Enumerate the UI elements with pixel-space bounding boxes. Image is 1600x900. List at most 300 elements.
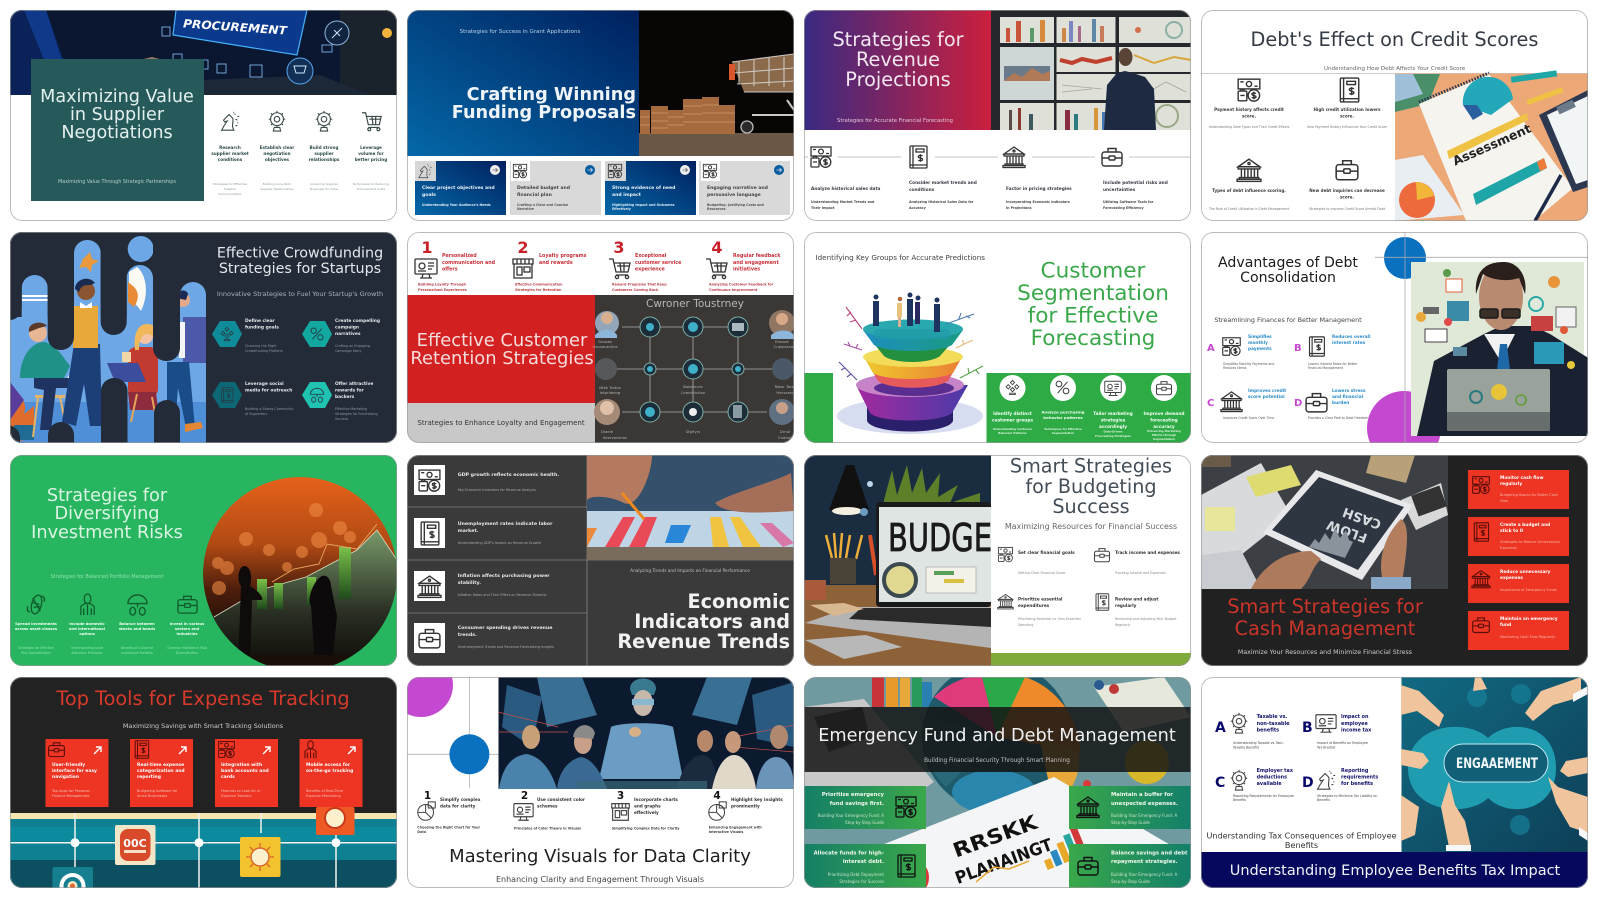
panel: Strategies for Revenue Projections [804, 10, 1191, 221]
diagram: customer journey photo: Ntkk Trates [599, 385, 621, 390]
step cards: Strong evidence of need [612, 185, 675, 191]
four tips: Allocation Principles [71, 651, 103, 655]
icons and steps: Proposals for Value [310, 187, 338, 191]
hexagon features: backers [335, 394, 355, 400]
photo: procurement screen: PROCUREMENT [183, 16, 289, 38]
red tip cards: Monitoring Cash Flow Regularly [1500, 635, 1555, 639]
red tip cards: expenses [1500, 576, 1523, 581]
tips grid: Prioritizing Essential vs. Non-Essential [1018, 617, 1081, 621]
lettered points: available [1256, 781, 1282, 787]
diagram: customer journey photo: Interventrion [603, 435, 628, 440]
subtitle: Enhancing Clarity and Engagement Through Visuals [496, 875, 704, 884]
numbered steps: 3 [613, 238, 625, 257]
icons and steps: Communication [218, 192, 242, 196]
panel: Emergency Fund and Debt Management: repayment strategies. [1111, 859, 1177, 865]
lettered points: deductions [1256, 774, 1287, 780]
hexagon features: Choosing the Right [245, 344, 277, 348]
four tips: Include domestic [69, 622, 105, 626]
subtitle: Understanding Tax Consequences of Employee [1206, 830, 1396, 840]
illustration: layered funnel with people [837, 292, 983, 434]
title bar [1200, 852, 1588, 888]
title: Top Tools for Expense Tracking [55, 687, 350, 710]
subtitle: Streamlining Finances for Better Management [1214, 316, 1362, 324]
grid of points: Payment history affects credit [1214, 107, 1283, 112]
step text: Analyze historical sales data [811, 186, 880, 192]
numbered tips: Use consistent color [537, 797, 586, 802]
lettered benefits: Simplifies Monthly Payments and [1222, 362, 1274, 366]
lettered benefits [1206, 334, 1371, 420]
icons and steps: objectives [265, 157, 290, 162]
step text: Accuracy [909, 206, 927, 210]
numbered tips: Incorporate charts [634, 797, 678, 802]
subtitle: Maximize Your Resources and Minimize Financial Stress [1237, 649, 1412, 656]
tool cards: Features to Look for in [221, 789, 260, 793]
title: Smart Strategies for [1227, 595, 1422, 618]
panel: Emergency Fund and Debt Management: Step-by-Step Guide [1111, 820, 1150, 825]
feature circles: Enhancing Marketing [1147, 429, 1181, 433]
title: Strategies for [47, 486, 168, 506]
grid of points: Understanding Debt Types and Their Credit Effects [1208, 125, 1289, 129]
four tips: Spread investments [15, 622, 58, 626]
photo: cash flow tablet: FLOW [1324, 516, 1369, 545]
hexagon features: funding goals [245, 324, 279, 330]
tool cards: cards [221, 774, 235, 780]
tool cards: Small Businesses [137, 794, 167, 798]
panel: Emergency Fund and Debt Management [804, 677, 1191, 888]
icons and steps: Build strong [310, 145, 338, 150]
step text: Analyzing Historical Sales Data for [909, 200, 974, 204]
photo: pie chart and risk planning sheet: PLANAINGT [953, 835, 1056, 888]
title: Segmentation [1017, 281, 1169, 306]
subtitle panel: Strategies to Enhance Loyalty and Engagement [417, 419, 585, 427]
title: Customer [1041, 258, 1146, 284]
feature circles: Segmentation [1052, 431, 1074, 435]
title block: Revenue Trends [617, 630, 790, 653]
panel: Emergency Fund and Debt Management: Building Your Emergency Fund: A [1111, 813, 1177, 818]
title: for Effective [1028, 304, 1158, 328]
panel: Smart Strategies for Cash Management [1200, 455, 1588, 666]
title [1200, 28, 1588, 74]
indicator rows: Inflation Rates and Their Effect on Revenue Streams [458, 593, 547, 597]
hexagon features: campaign [335, 324, 359, 330]
hexagon features: Building a Strong Community [245, 407, 294, 411]
hexagon features [212, 318, 380, 421]
tips grid: Tracking Income and Expenses [1114, 571, 1166, 575]
panel: Emergency Fund and Debt Management: Maintain a buffer for [1111, 792, 1173, 798]
lettered points: non-taxable [1256, 721, 1290, 727]
numbered steps: communication and [442, 260, 496, 266]
lettered points: Benefits [1316, 798, 1330, 802]
photo: cash flow tablet [1200, 455, 1448, 589]
grid of points: How Payment History Influences Your Credit Score [1306, 125, 1387, 129]
diagram: customer journey photo: Drnol [780, 429, 790, 434]
title panel: Maximizing Value [40, 87, 194, 107]
title: Mastering Visuals for Data Clarity [449, 846, 751, 867]
subtitle panel [407, 403, 595, 443]
lettered points: Impact on [1340, 714, 1369, 720]
panel: Economic Indicators and Revenue Trends [407, 455, 794, 666]
numbered steps: initiatives [733, 266, 760, 272]
photo: analysts around holographic table [498, 677, 794, 789]
tool cards: Benefits of Real-Time [306, 789, 343, 793]
numbered steps: customer service [635, 260, 682, 266]
hexagon features: Crowdfunding Platform [245, 349, 283, 353]
lettered benefits: Simplifies [1248, 334, 1272, 340]
tool cards: Top Apps for Personal [51, 789, 90, 793]
lettered benefits: Provides a Clear Path to Debt Freedom [1308, 416, 1367, 420]
title panel: Retention Strategies [410, 348, 594, 369]
numbered tips: Interactive Visuals [709, 830, 743, 834]
step cards: Engaging narrative and [707, 185, 768, 191]
title: Investment Risks [31, 523, 183, 543]
subtitle [1206, 830, 1396, 850]
lettered points: employee [1340, 721, 1368, 727]
feature circles: Understanding Customer [993, 427, 1033, 431]
title [1010, 454, 1172, 518]
title: Forecasting [1031, 326, 1155, 351]
numbered steps: 1 [421, 238, 433, 257]
indicator rows: trends. [458, 632, 477, 638]
numbered steps: Exceptional [635, 253, 667, 259]
numbered tips: Choosing the Right Chart for Your [417, 826, 480, 830]
icons and steps: supplier market [211, 151, 249, 156]
lettered points: Understanding Taxable vs. Non- [1232, 741, 1283, 745]
title: Advantages of Debt [1218, 255, 1358, 271]
tips grid: expenditures [1018, 603, 1050, 608]
lettered benefits: Improves Credit Score Over Time [1222, 416, 1274, 420]
numbered tips: 4 [713, 790, 721, 802]
lettered points: Tax Bracket [1316, 746, 1336, 750]
step text: Factor in pricing strategies [1006, 186, 1072, 192]
title [1017, 258, 1169, 351]
icons and steps: Techniques for Reducing [352, 182, 389, 186]
red tip cards: Budgeting Basics for Better Cash [1500, 493, 1557, 497]
feature circles: Analyze purchasing [1042, 410, 1085, 414]
photo: pie chart and risk planning sheet: RRSKK [950, 809, 1042, 863]
grid of points: The Role of Credit Utilization in Debt Management [1207, 207, 1289, 211]
icons and steps: volume for [358, 151, 385, 156]
numbered steps: Continuous Improvement [709, 288, 758, 292]
panel: Emergency Fund and Debt Management: Balance savings and debt [1111, 850, 1188, 856]
hexagon features: Define clear [245, 318, 276, 324]
four tips: Invest in various [170, 622, 205, 626]
hero with title: Funding Proposals [452, 103, 636, 123]
subtitle: Strategies for Balanced Portfolio Management [51, 574, 164, 580]
red tip cards: fund [1500, 622, 1511, 628]
tool cards: bank accounts and [221, 768, 269, 774]
diagram: customer journey photo: Emoort [775, 339, 789, 344]
numbered tips: Simplify complex [440, 797, 481, 802]
tips grid: Prioritize essential [1018, 596, 1063, 602]
lettered points: requirements [1340, 774, 1378, 780]
tips grid: Set clear financial goals [1018, 550, 1075, 555]
tips grid: regularly [1115, 603, 1137, 608]
indicator rows: GDP growth reflects economic health. [458, 472, 559, 478]
lettered benefits: Reduces overall [1332, 334, 1371, 340]
numbered tips: Highlight key insights [731, 797, 783, 802]
lettered benefits: payments [1248, 346, 1272, 352]
panel: Strategies for Diversifying Investment Risks [10, 455, 397, 666]
illustration: startup team [10, 232, 206, 443]
numbered steps: Building Loyalty Through [418, 282, 467, 286]
lettered benefits: burden [1332, 400, 1349, 406]
step cards: and impact [612, 192, 642, 198]
tool cards: on-the-go tracking [306, 768, 353, 774]
hexagon features: media for outreach [245, 388, 292, 394]
diagram: customer journey photo [592, 295, 796, 443]
four tips: Strategies for Effective [18, 646, 54, 650]
red tip cards: stick to it [1500, 528, 1523, 534]
lettered points: D [1302, 775, 1313, 791]
photo: laptop showing budget: BUDGE [888, 516, 992, 560]
hero with title: Strategies for [832, 28, 964, 51]
icons and steps: Establish clear [260, 145, 295, 150]
step text: uncertainties [1103, 187, 1136, 193]
hexagon features: narratives [335, 331, 361, 337]
accent bar [991, 653, 1191, 666]
panel: Smart Strategies for Budgeting Success [804, 455, 1191, 666]
lettered benefits: Reduces Stress [1222, 366, 1246, 370]
hero with title: Strategies for Success in Grant Applications [460, 29, 580, 35]
icons and steps: Supplier Relationships [260, 187, 294, 191]
hexagon features: Offer attractive [335, 381, 373, 387]
step cards: Budgeting: Justifying Costs and [707, 203, 765, 207]
diagram: customer journey photo: Cwroner Toustrney [646, 298, 744, 310]
numbered steps: Regular feedback [733, 253, 781, 259]
step cards: Effectively [612, 207, 632, 211]
lettered points: Reporting Requirements for Employee [1232, 794, 1293, 798]
red tip cards: Flow [1500, 499, 1508, 503]
timeline icons [804, 156, 1191, 158]
hexagon features: of Supporters [245, 412, 268, 416]
lettered benefits: D [1294, 398, 1302, 409]
step cards: Narrative [517, 207, 534, 211]
feature circles [992, 375, 1184, 441]
lettered points: Strategies to Minimize Tax Liability on [1316, 794, 1377, 798]
panel: Understanding Employee Benefits Tax Impact [1200, 677, 1588, 888]
lettered benefits: Improves credit [1248, 388, 1286, 394]
hexagon features: Create compelling [335, 318, 380, 324]
icons and steps: Analyzing Supplier [310, 182, 339, 186]
step text: Include potential risks and [1103, 180, 1168, 186]
lettered points: Benefits [1232, 798, 1246, 802]
feature circles: Identify distinct [993, 411, 1032, 417]
red tip cards: Strategies to Reduce Unnecessary [1500, 540, 1560, 544]
numbered steps: 2 [517, 238, 529, 257]
tips grid: Track income and expenses [1115, 550, 1180, 555]
photo: laptop showing budget [804, 455, 992, 666]
feature circles: Forecasting Strategies [1095, 434, 1131, 438]
hero with title [407, 10, 639, 156]
tips grid: Setting Clear Financial Goals [1018, 571, 1066, 575]
four tips: Balance between [119, 622, 155, 626]
indicator rows: Unemployment Trends and Revenue Forecasting Insights [458, 645, 554, 649]
title: for Budgeting [1025, 475, 1157, 498]
step cards: Clear project objectives and [422, 185, 495, 191]
numbered tips: 2 [521, 790, 528, 802]
step cards: Detailed budget and [517, 185, 570, 191]
icons and steps: Leverage [360, 145, 382, 150]
red tip cards: Importance of Emergency Funds [1500, 588, 1556, 592]
panel: Emergency Fund and Debt Management: Strategies for Success [839, 879, 884, 884]
step cards: goals [422, 192, 436, 198]
numbered steps [415, 238, 781, 292]
tips grid [998, 547, 1180, 627]
hexagon features: Effective Marketing [335, 407, 367, 411]
icons and steps: negotiation [263, 151, 291, 156]
numbered steps: Loyalty programs [539, 253, 587, 259]
numbered steps: Personalized Experiences [418, 288, 467, 292]
panel: Emergency Fund and Debt Management: Building Your Emergency Fund: A [818, 813, 884, 818]
feature circles: strategies [1101, 418, 1126, 424]
title: Diversifying [54, 504, 160, 524]
tool cards: Integration with [221, 762, 262, 768]
red tip cards: regularly [1500, 481, 1522, 487]
indicator rows: market. [458, 528, 479, 534]
hero with title: Crafting Winning [467, 85, 636, 105]
title band: Building Financial Security Through Smart Planning [924, 758, 1070, 764]
feature circles: accordingly [1099, 424, 1127, 430]
title: Consolidation [1240, 270, 1335, 286]
step text: Their Impact [811, 206, 835, 210]
four tips: Common Mistakes in Risk [167, 646, 207, 650]
step cards: Highlighting Impact and Outcomes [612, 203, 675, 207]
numbered tips: Principles of Color Theory in Visuals [514, 826, 581, 830]
title: Success [1052, 495, 1130, 518]
step text: Consider market trends and [909, 180, 977, 186]
step text: conditions [909, 187, 935, 193]
diagram: customer journey photo: Comrthiction [681, 390, 706, 395]
feature circles: Improve demand [1144, 411, 1184, 417]
panel: Emergency Fund and Debt Management: Step-by-Step Guide [845, 820, 885, 825]
tool cards: Expense Trackers [221, 794, 252, 798]
lettered points: Reporting [1340, 768, 1368, 774]
decorative circles [389, 653, 499, 788]
icons and steps: relationships [309, 157, 340, 162]
step cards: Resources [707, 207, 726, 211]
numbered tips: effectively [634, 810, 659, 815]
step text [811, 180, 1168, 210]
numbered tips: 1 [424, 790, 431, 802]
icons and steps: conditions [218, 157, 243, 162]
title: Effective Crowdfunding [217, 246, 383, 262]
photo: man at laptop with icons [1410, 262, 1600, 436]
diagram: customer journey photo: Intprideing [600, 390, 621, 395]
grid of points: High credit utilization lowers [1313, 107, 1381, 112]
icons and steps: Building Long-Term [263, 182, 291, 186]
diagram: customer journey photo: Gnoses [598, 339, 612, 344]
feature circles: Segmentation [1153, 437, 1175, 441]
numbered steps: Effective Communication [515, 282, 563, 286]
photo: pie chart and risk planning sheet [804, 662, 1191, 889]
lettered points: Impact of Benefits on Employee [1316, 741, 1367, 745]
hero with title [804, 10, 991, 130]
photo: cash flow tablet: CASH [1340, 504, 1383, 531]
panel: Emergency Fund and Debt Management: interest debt. [843, 859, 884, 865]
lettered points: B [1302, 720, 1312, 736]
subtitle: Maximizing Resources for Financial Success [1005, 522, 1177, 531]
grid of points: New debt inquiries can decrease [1309, 188, 1384, 193]
icons and steps: better pricing [355, 157, 387, 162]
feature circles: Techniques for Effective [1044, 427, 1082, 431]
lettered points: benefits [1256, 728, 1279, 734]
four tips: Benefits of a Diverse [121, 646, 153, 650]
feature circles: Tailor marketing [1093, 411, 1133, 417]
photo: pen on bar chart [587, 455, 794, 560]
title bar: Understanding Employee Benefits Tax Impact [1229, 863, 1560, 879]
title block [617, 568, 790, 653]
photo: investors and rising chart [200, 477, 397, 671]
lettered points: C [1214, 775, 1225, 791]
numbered tips: prominently [731, 804, 760, 808]
tips grid: Reviewing and Adjusting Your Budget [1115, 617, 1177, 621]
subtitle: Identifying Key Groups for Accurate Predictions [816, 253, 985, 262]
step cards: persuasive language [707, 192, 761, 198]
panel: Crafting Winning Funding Proposals [407, 10, 794, 221]
hexagon features: Success [335, 417, 349, 421]
numbered tips: 3 [617, 790, 624, 802]
numbered tips: Enhancing Engagement with [709, 826, 762, 830]
step cards: Understanding Your Audience's Needs [422, 203, 491, 207]
hexagon features: Campaign Story [335, 349, 362, 353]
decorative circles [1366, 237, 1440, 465]
lettered benefits: interest rates [1332, 340, 1365, 346]
diagram: customer journey photo: Hecssmo [776, 390, 794, 395]
lettered benefits: and financial [1332, 394, 1363, 400]
photo: coins and cart [639, 10, 794, 156]
panel: Emergency Fund and Debt Management: Allocate funds for high- [814, 850, 884, 856]
title: Smart Strategies [1010, 455, 1172, 478]
feature circles: Data-Driven [1104, 430, 1122, 434]
lettered benefits: monthly [1248, 340, 1268, 346]
numbered steps: and engagement [733, 260, 779, 266]
lettered points: income tax [1340, 728, 1372, 734]
feature circles: behavior patterns [1043, 415, 1083, 420]
lettered benefits: C [1206, 398, 1214, 409]
grid of points: score. [1339, 114, 1354, 118]
grid of points: score. [1241, 114, 1256, 118]
panel: Maximizing Value in Supplier Negotiations [10, 10, 397, 221]
illustration: connected app tiles: 00C [123, 837, 147, 850]
hexagon features: Crafting an Engaging [335, 344, 370, 348]
red tip cards: Maintain an emergency [1500, 616, 1557, 622]
subtitle: Maximizing Savings with Smart Tracking Solutions [123, 722, 284, 730]
title band [804, 707, 1191, 772]
title [217, 246, 383, 298]
four tips: and international [69, 627, 105, 631]
panel: Customer Segmentation for Effective Forecasting [804, 232, 1191, 443]
red tip cards: Expenses [1500, 546, 1516, 550]
numbered steps: Customers Coming Back [612, 288, 659, 292]
tool cards: categorization and [137, 768, 185, 774]
icons and steps: Research [219, 145, 241, 150]
lettered benefits: B [1294, 343, 1301, 354]
step text: in Projections [1006, 206, 1032, 210]
panel: Emergency Fund and Debt Management: unexpected expenses. [1111, 801, 1178, 807]
numbered tips [417, 790, 783, 834]
tool cards: reporting [137, 774, 161, 780]
lettered points: Employer tax [1256, 768, 1293, 774]
tips grid: Review and adjust [1115, 596, 1158, 602]
diagram: customer journey photo: Stpfiyrs [686, 429, 700, 434]
feature circles: Behavior Patterns [998, 431, 1027, 435]
title: Understanding How Debt Affects Your Credit Score [1323, 66, 1465, 72]
numbered steps: Personalized [442, 253, 477, 259]
panel: Emergency Fund and Debt Management: Building Your Emergency Fund: A [1111, 872, 1177, 877]
tool cards: User-friendly [52, 762, 85, 768]
hexagon features: rewards for [335, 388, 365, 394]
lettered benefits: Lowers Interest Rates for Better [1308, 362, 1358, 366]
